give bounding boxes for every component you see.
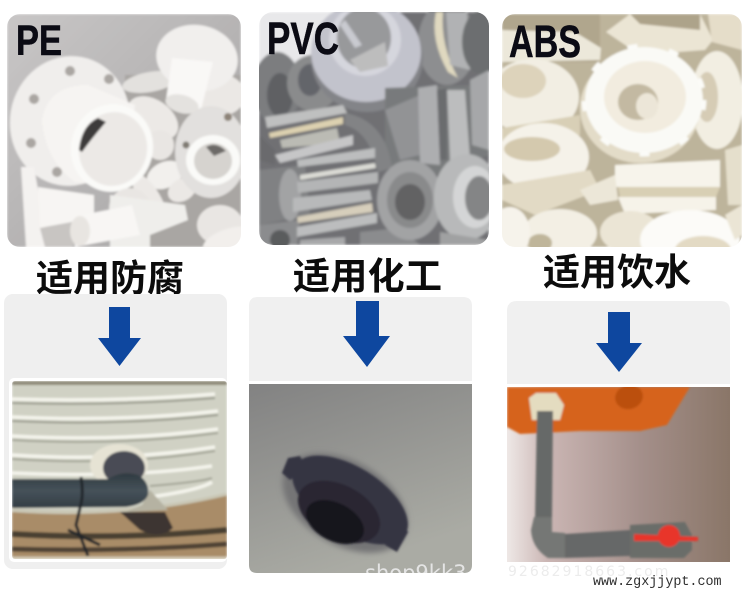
watermark: shop9kk3 <box>365 561 466 585</box>
panel: chemical application <box>249 297 472 585</box>
panel: anticorrosion application <box>4 294 227 569</box>
watermark: faint band text: 92682918663.com <box>508 564 670 580</box>
photo: tank with gray pipe <box>12 381 227 559</box>
footer: website url: www.zgxjjypt.com <box>593 575 722 590</box>
photo: orange tank with pipe and valve <box>507 382 730 562</box>
label: PVC: PVC <box>267 13 339 64</box>
photo: dark fitting on gray wall <box>249 384 472 585</box>
panel: PE fittings photo <box>7 14 241 247</box>
icon: blue arrow <box>343 301 390 367</box>
heading: PVC use: 适用化工 <box>293 256 442 297</box>
panel: drinking water application <box>507 301 730 562</box>
label: PE: PE <box>16 17 62 65</box>
panel: PVC fittings photo <box>259 12 489 245</box>
icon: blue arrow <box>98 307 141 366</box>
panel: ABS fittings photo <box>502 14 742 247</box>
icon: blue arrow <box>596 312 642 372</box>
heading: ABS use: 适用饮水 <box>543 252 691 293</box>
heading: PE use: 适用防腐 <box>36 258 184 299</box>
label: ABS: ABS <box>509 16 581 67</box>
